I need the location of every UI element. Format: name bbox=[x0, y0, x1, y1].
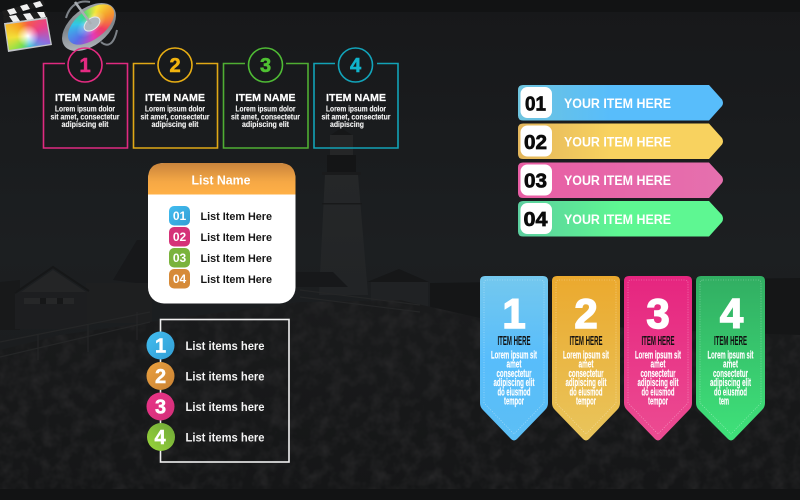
ribbon 2: do eiusmod bbox=[570, 386, 602, 398]
arrow 02: 02 bbox=[524, 132, 547, 154]
ribbon 1: ITEM HERE bbox=[498, 334, 530, 348]
circle item 4: 4 bbox=[154, 427, 166, 449]
panel: arrow list bbox=[518, 85, 723, 236]
list row 02: List Item Here bbox=[200, 232, 272, 244]
card 4: sit amet, consectetur bbox=[322, 112, 390, 122]
ribbon 2: Lorem ipsum sit bbox=[563, 350, 609, 362]
card 4: adipiscing bbox=[330, 120, 364, 129]
circle item 4 bbox=[147, 423, 264, 451]
list row 03: 03 bbox=[173, 251, 186, 265]
ribbon 3: tempor bbox=[648, 396, 668, 408]
ribbon 1: do eiusmod bbox=[498, 386, 530, 398]
list row 04: 04 bbox=[173, 272, 186, 286]
ribbon 2: tempor bbox=[576, 396, 596, 408]
arrow 04: 04 bbox=[524, 209, 548, 231]
card 4 bbox=[314, 48, 398, 148]
panel: list card bbox=[148, 163, 296, 304]
ribbon 3: do eiusmod bbox=[642, 386, 674, 398]
ribbon 2 bbox=[552, 276, 620, 440]
list row 03: List Item Here bbox=[200, 253, 272, 265]
panel: numbered item cards bbox=[44, 48, 398, 148]
list row 03 bbox=[169, 248, 272, 268]
central roofs bbox=[296, 272, 348, 287]
list row 04: List Item Here bbox=[200, 274, 272, 286]
list card header: List Name bbox=[192, 172, 250, 188]
ribbon 1: 1 bbox=[502, 290, 526, 337]
card 2: Lorem ipsum dolor bbox=[145, 104, 205, 114]
list row 01: List Item Here bbox=[200, 211, 272, 223]
circle item 3: List items here bbox=[186, 402, 264, 414]
circle item 2: 2 bbox=[155, 366, 166, 388]
ribbon 2: consectetur bbox=[568, 368, 604, 380]
ribbon 3: 3 bbox=[646, 290, 670, 337]
ribbon 2: 2 bbox=[574, 290, 598, 337]
rocks bbox=[0, 300, 800, 490]
arrow 01: YOUR ITEM HERE bbox=[564, 96, 671, 111]
ribbon 3 bbox=[624, 276, 692, 440]
lighthouse tower bbox=[319, 128, 368, 295]
right house bbox=[367, 269, 429, 307]
ribbon 3: consectetur bbox=[640, 368, 676, 380]
arrow 02: YOUR ITEM HERE bbox=[564, 134, 671, 150]
ribbon 1: consectetur bbox=[496, 368, 532, 380]
card 3: adipiscing elit bbox=[242, 120, 289, 129]
arrow 04: YOUR ITEM HERE bbox=[564, 212, 671, 227]
card 1: sit amet, consectetur bbox=[50, 112, 120, 122]
card 1: ITEM NAME bbox=[55, 92, 115, 104]
ribbon 2: amet bbox=[578, 359, 594, 371]
circle item 2 bbox=[146, 362, 264, 390]
ribbon 1: adipiscing elit bbox=[494, 377, 535, 389]
ribbon 4 bbox=[696, 276, 765, 440]
circle item 1: List items here bbox=[186, 341, 264, 353]
arrow 03: YOUR ITEM HERE bbox=[564, 173, 671, 188]
circle item 3 bbox=[146, 392, 264, 420]
list row 02 bbox=[169, 227, 272, 246]
icon: video editing clapperboard bbox=[2, 0, 52, 52]
circle item 1 bbox=[146, 332, 264, 360]
ribbon 1 bbox=[480, 276, 548, 440]
card 3 bbox=[224, 48, 308, 148]
card 4: Lorem ipsum dolor bbox=[326, 104, 386, 114]
card 3: 3 bbox=[260, 55, 271, 77]
ribbon 3: ITEM HERE bbox=[642, 334, 674, 348]
ribbon 4: Lorem ipsum sit bbox=[708, 350, 754, 362]
list row 01: 01 bbox=[173, 209, 186, 223]
ribbon 4: consectetur bbox=[713, 368, 748, 380]
arrow 03: 03 bbox=[524, 170, 547, 192]
panel: framed circle list bbox=[146, 320, 289, 462]
card 2: adipiscing elit bbox=[152, 120, 199, 129]
ribbon 4: do eiusmod bbox=[714, 386, 747, 398]
ribbon 2: ITEM HERE bbox=[570, 334, 602, 348]
distant dark hill bbox=[430, 278, 800, 340]
ribbon 4: tem bbox=[719, 396, 729, 408]
ribbon 4: 4 bbox=[720, 290, 744, 337]
ribbon 1: amet bbox=[506, 359, 522, 371]
background photo: lighthouse on rocks bbox=[0, 135, 800, 489]
list row 01 bbox=[169, 206, 272, 226]
card 2: sit amet, consectetur bbox=[140, 112, 210, 122]
ribbon 3: amet bbox=[650, 359, 666, 371]
card 4: 4 bbox=[350, 55, 362, 77]
card 3: ITEM NAME bbox=[236, 92, 296, 104]
list row 02: 02 bbox=[173, 230, 186, 244]
list row 04 bbox=[169, 269, 272, 288]
arrow 04 bbox=[518, 201, 723, 236]
ribbon 4: ITEM HERE bbox=[714, 334, 747, 348]
fences bbox=[0, 290, 420, 360]
list card header bbox=[148, 163, 296, 194]
card 2: ITEM NAME bbox=[145, 92, 205, 104]
circle item 1: 1 bbox=[155, 336, 166, 358]
card 1: 1 bbox=[79, 55, 91, 77]
card 1: adipiscing elit bbox=[62, 120, 109, 129]
card 1 bbox=[44, 48, 128, 148]
card 2: 2 bbox=[169, 55, 181, 77]
ribbon 3: adipiscing elit bbox=[638, 377, 679, 389]
arrow 01 bbox=[518, 85, 723, 120]
ribbon 4: adipiscing elit bbox=[710, 377, 751, 389]
card 3: sit amet, consectetur bbox=[231, 112, 300, 122]
circle item 2: List items here bbox=[186, 372, 264, 384]
arrow 02 bbox=[518, 124, 723, 159]
icon: motion graphics app disc bbox=[53, 0, 125, 61]
card 2 bbox=[134, 48, 218, 148]
arrow 01: 01 bbox=[525, 94, 546, 116]
ribbon 1: tempor bbox=[504, 396, 524, 408]
card 1: Lorem ipsum dolor bbox=[55, 104, 115, 114]
circle item 3: 3 bbox=[155, 396, 166, 418]
ribbon 4: amet bbox=[723, 359, 738, 371]
ribbon 1: Lorem ipsum sit bbox=[491, 350, 537, 362]
circle item 4: List items here bbox=[186, 432, 264, 444]
arrow 03 bbox=[518, 162, 723, 198]
ribbon 3: Lorem ipsum sit bbox=[635, 350, 681, 362]
card 3: Lorem ipsum dolor bbox=[236, 104, 296, 114]
panel: ribbon cards bbox=[480, 276, 765, 440]
left house bbox=[0, 240, 152, 330]
ribbon 2: adipiscing elit bbox=[566, 377, 607, 389]
card 4: ITEM NAME bbox=[326, 92, 386, 104]
